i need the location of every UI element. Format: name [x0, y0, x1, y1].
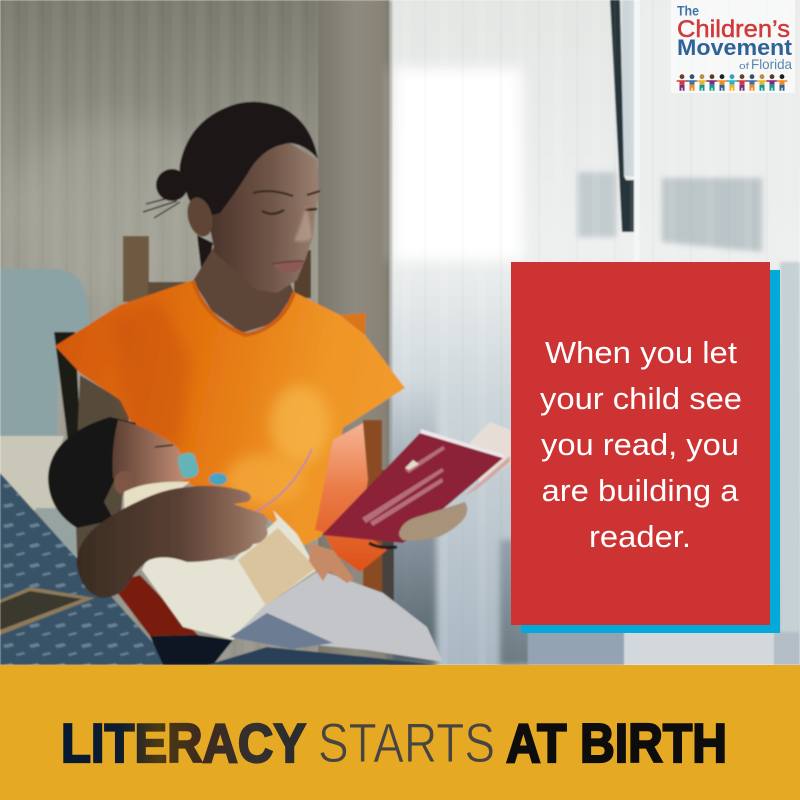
- book: [322, 429, 510, 543]
- mother: hair bun and loose hair: [143, 169, 213, 273]
- mother: jeans: [207, 647, 437, 665]
- bracelet: [369, 543, 397, 548]
- logo: wordmark: The: [677, 2, 699, 18]
- callout text: you read, you: [541, 427, 739, 462]
- mother: ear: [184, 195, 216, 239]
- callout text: When you let: [545, 335, 737, 370]
- background: blue armchair: [0, 269, 91, 439]
- mother: dark lap shadow: [150, 635, 233, 665]
- mother: facial features: [253, 191, 320, 273]
- logo: wordmark: of: [739, 61, 750, 71]
- phone on table: [0, 587, 95, 635]
- baby: head: [48, 417, 187, 528]
- background: seat below cushion: [35, 508, 79, 560]
- book back cover: [470, 422, 511, 485]
- callout text: reader.: [589, 519, 691, 554]
- baby: grey pants: [233, 570, 443, 662]
- chair frame: [54, 313, 394, 620]
- background: pillar: [318, 0, 392, 665]
- footer band: [0, 665, 800, 800]
- baby: pacifier: [176, 451, 227, 485]
- logo: wordmark: Children’s: [677, 16, 790, 43]
- mother: face: [207, 143, 319, 293]
- mother: right arm lit orange: [315, 423, 387, 572]
- mother: hand holding book: [399, 502, 467, 540]
- headline: Literacy Starts at Birth: LITERACY: [61, 712, 306, 774]
- callout: blue offset shadow: [521, 270, 780, 633]
- headline: Literacy Starts at Birth: STARTS: [318, 711, 495, 774]
- background: cushion: [0, 436, 64, 510]
- logo: wordmark: [677, 2, 793, 72]
- mother: upper arm behind baby: [75, 375, 130, 555]
- mother: arm and hand cradling baby: [76, 486, 268, 598]
- callout: red panel: [511, 262, 770, 625]
- mother: hair: [180, 102, 318, 215]
- headline: Literacy Starts at Birth: AT BIRTH: [506, 712, 727, 774]
- baby: pants shadow: [230, 613, 333, 649]
- callout text: are building a: [542, 473, 739, 508]
- background: wooden chair top: [123, 236, 311, 302]
- baby: cream body: [142, 510, 317, 640]
- callout text: [540, 335, 742, 554]
- table: [0, 473, 173, 665]
- logo: wordmark: Florida: [751, 56, 792, 72]
- logo: paper-doll chain: [677, 74, 787, 91]
- background: sheer curtain and window: [387, 0, 800, 665]
- headline: Literacy Starts at Birth: [61, 711, 727, 774]
- mother: lower shirt in shadow: [110, 575, 198, 636]
- table pattern: [0, 473, 173, 665]
- callout text: your child see: [540, 381, 742, 416]
- mother: neck: [193, 245, 294, 333]
- baby: knit band: [238, 528, 316, 606]
- logo: wordmark: Movement: [677, 35, 793, 60]
- baby: cream collar: [124, 482, 190, 508]
- mother: orange t-shirt: [55, 280, 405, 548]
- smile line on shirt: [250, 449, 312, 514]
- baby: hand: [309, 543, 354, 583]
- logo panel: [671, 0, 795, 93]
- background: wall: [0, 0, 330, 665]
